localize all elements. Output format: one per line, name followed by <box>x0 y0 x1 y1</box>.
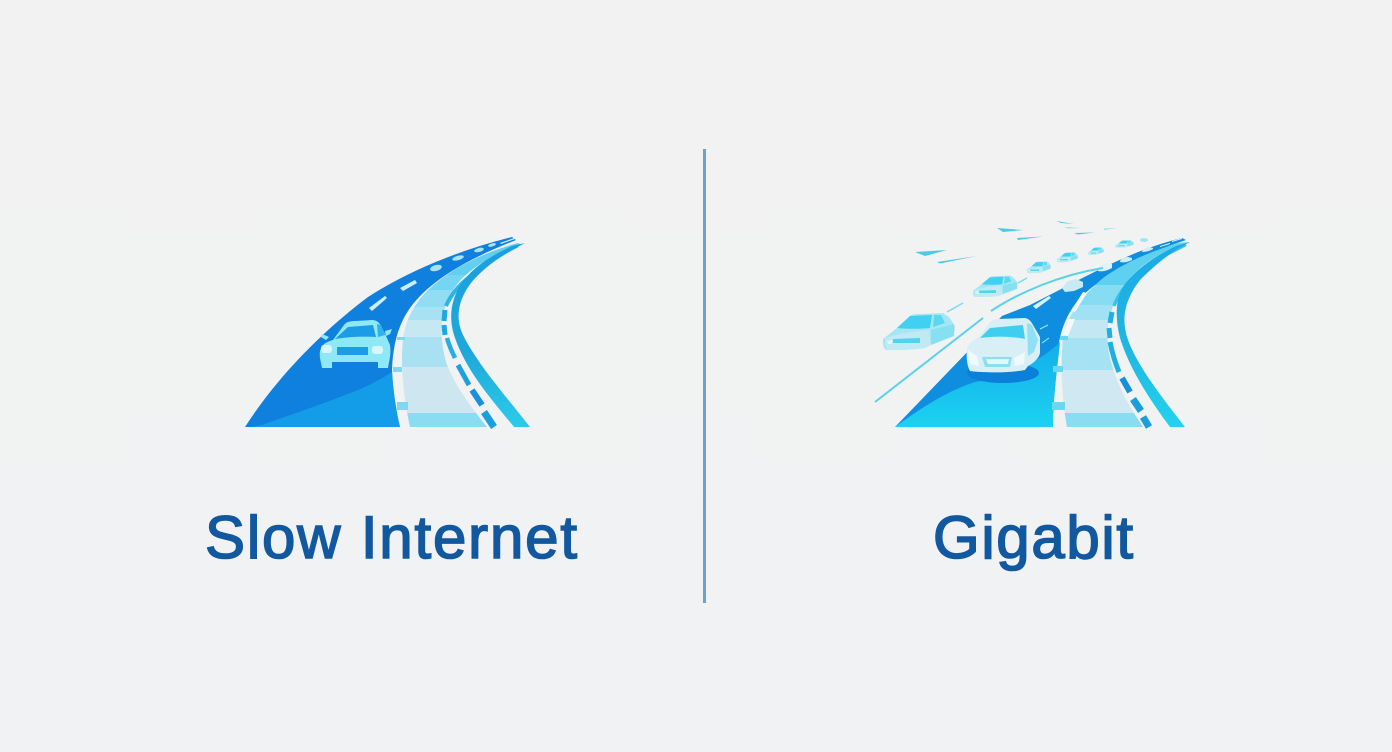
car: distant side car <box>1115 240 1134 248</box>
road surface: lighter foreground wedge <box>250 372 400 427</box>
car: medium side car <box>973 276 1018 297</box>
road centre dashes <box>369 238 515 311</box>
lane edge markers <box>1052 336 1068 410</box>
panel: gigabit <box>875 221 1195 571</box>
outer road stripe <box>451 243 530 427</box>
label: Gigabit: Gigabit <box>933 504 1133 571</box>
road illustration: slow single car <box>245 237 530 427</box>
thin edge line <box>875 268 1103 402</box>
road surface: blue lane <box>895 238 1186 427</box>
road surface: cyan foreground wedge <box>895 342 1060 427</box>
label: Slow Internet: Slow Internet <box>205 504 577 571</box>
car: small side car <box>1027 261 1051 273</box>
small cars and dashes on road <box>1062 238 1182 292</box>
infographic: slow internet versus gigabit road comparison <box>206 149 1190 603</box>
car shadow on road <box>967 363 1039 383</box>
car: tiny side car <box>1088 247 1104 255</box>
car: large side car <box>883 313 955 350</box>
road lane: pale checkered band <box>402 243 522 427</box>
center divider <box>703 149 706 603</box>
panel: slow internet <box>205 237 577 571</box>
speed streaks above road <box>915 221 1117 264</box>
road surface: dark blue lane <box>245 237 516 427</box>
car: farthest side car <box>1140 238 1148 242</box>
road centre dashes <box>1033 296 1051 309</box>
speed line by far car <box>947 303 963 312</box>
outer road stripe <box>1117 242 1190 427</box>
lane edge markers <box>393 337 408 410</box>
car: smaller side car <box>1057 252 1078 262</box>
road illustration: fast traffic <box>875 221 1195 427</box>
road lane: pale checkered band <box>1062 242 1190 427</box>
white dashes between road and lane <box>1063 292 1087 336</box>
dashed blue lane line <box>444 246 518 427</box>
dashed blue lane line <box>1109 245 1186 427</box>
icon: slow car <box>320 320 392 368</box>
icon: main fast car <box>967 318 1049 372</box>
